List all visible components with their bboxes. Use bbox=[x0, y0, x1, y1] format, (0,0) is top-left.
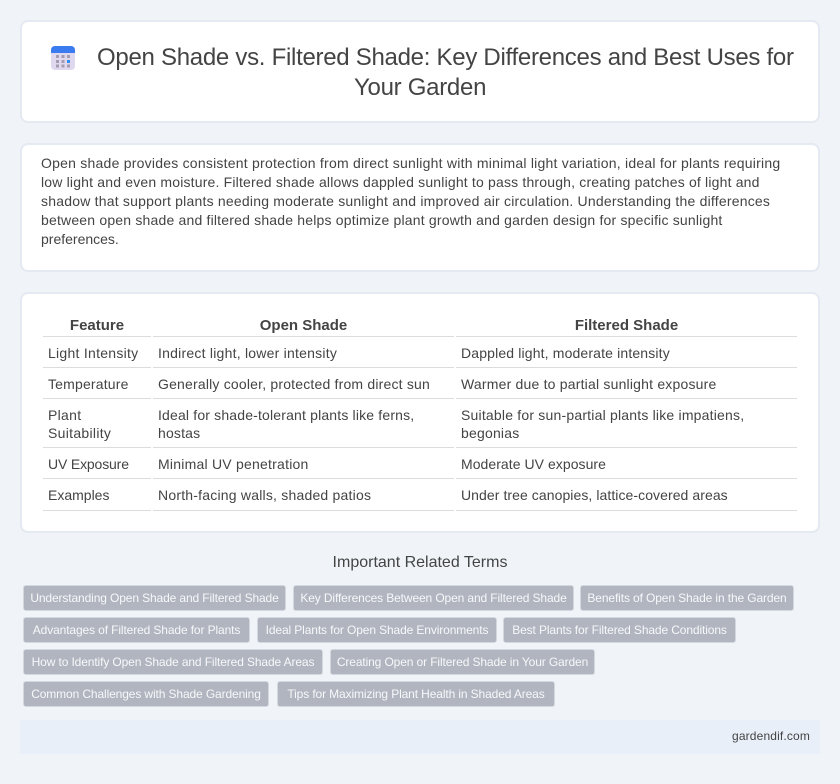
comparison table: UV Exposure bbox=[48, 456, 129, 472]
related term tags: Understanding Open Shade and Filtered Shade bbox=[30, 591, 279, 605]
related term tags: Ideal Plants for Open Shade Environments bbox=[266, 623, 488, 637]
intro text: between open shade and filtered shade helps optimize plant growth and garden design for specific sunlight bbox=[41, 212, 722, 228]
panel: comparison table bbox=[20, 292, 820, 533]
intro text bbox=[41, 155, 780, 247]
related term tags: Benefits of Open Shade in the Garden bbox=[587, 591, 787, 605]
intro text: Open shade provides consistent protection from direct sunlight with minimal light variation, ideal for plants requiring bbox=[41, 155, 780, 171]
comparison table bbox=[43, 317, 797, 511]
footer bar bbox=[20, 720, 820, 754]
related term tags: How to Identify Open Shade and Filtered Shade Areas bbox=[32, 655, 314, 669]
related term tags: Key Differences Between Open and Filtered Shade bbox=[300, 591, 567, 605]
comparison table: begonias bbox=[461, 425, 519, 441]
intro text: shadow that support plants needing moderate sunlight and improved air circulation. Understanding the differences bbox=[41, 193, 770, 209]
related term tags bbox=[23, 585, 794, 707]
panel: title card bbox=[20, 20, 820, 123]
intro text: low light and even moisture. Filtered shade allows dappled sunlight to pass through, creating patches of light and bbox=[41, 174, 760, 190]
comparison table: Warmer due to partial sunlight exposure bbox=[461, 376, 717, 392]
comparison table: Generally cooler, protected from direct sun bbox=[158, 376, 430, 392]
heading: related terms: Important Related Terms bbox=[333, 554, 507, 571]
comparison table: Temperature bbox=[48, 376, 129, 392]
comparison table: hostas bbox=[158, 425, 200, 441]
comparison table: Indirect light, lower intensity bbox=[158, 345, 337, 361]
related term tags: Tips for Maximizing Plant Health in Shaded Areas bbox=[287, 687, 545, 701]
comparison table: Open Shade bbox=[260, 317, 347, 334]
comparison table: Moderate UV exposure bbox=[461, 456, 606, 472]
comparison table: Suitable for sun-partial plants like impatiens, bbox=[461, 407, 744, 423]
comparison table: Filtered Shade bbox=[575, 317, 678, 334]
title: Open Shade vs. Filtered Shade: Key Differences and Best Uses for bbox=[97, 44, 794, 71]
intro text: preferences. bbox=[41, 231, 119, 247]
comparison table: Plant bbox=[48, 407, 81, 423]
panel: intro paragraph bbox=[20, 143, 820, 272]
related term tags: Creating Open or Filtered Shade in Your Garden bbox=[337, 655, 588, 669]
comparison table: North-facing walls, shaded patios bbox=[158, 487, 371, 503]
comparison table: Under tree canopies, lattice-covered areas bbox=[461, 487, 728, 503]
related term tags: Common Challenges with Shade Gardening bbox=[31, 687, 261, 701]
comparison table: Examples bbox=[48, 487, 109, 503]
comparison table: Ideal for shade-tolerant plants like ferns, bbox=[158, 407, 414, 423]
footer source: gardendif.com bbox=[732, 729, 810, 743]
related term tags: Advantages of Filtered Shade for Plants bbox=[33, 623, 240, 637]
comparison table: Light Intensity bbox=[48, 345, 138, 361]
title: Your Garden bbox=[354, 74, 486, 101]
comparison table: Feature bbox=[70, 317, 124, 334]
comparison table: Minimal UV penetration bbox=[158, 456, 309, 472]
related term tags: Best Plants for Filtered Shade Conditions bbox=[512, 623, 727, 637]
title bbox=[97, 44, 794, 101]
comparison table: Dappled light, moderate intensity bbox=[461, 345, 670, 361]
comparison table: Suitability bbox=[48, 425, 111, 441]
icon: calendar bbox=[51, 46, 75, 70]
